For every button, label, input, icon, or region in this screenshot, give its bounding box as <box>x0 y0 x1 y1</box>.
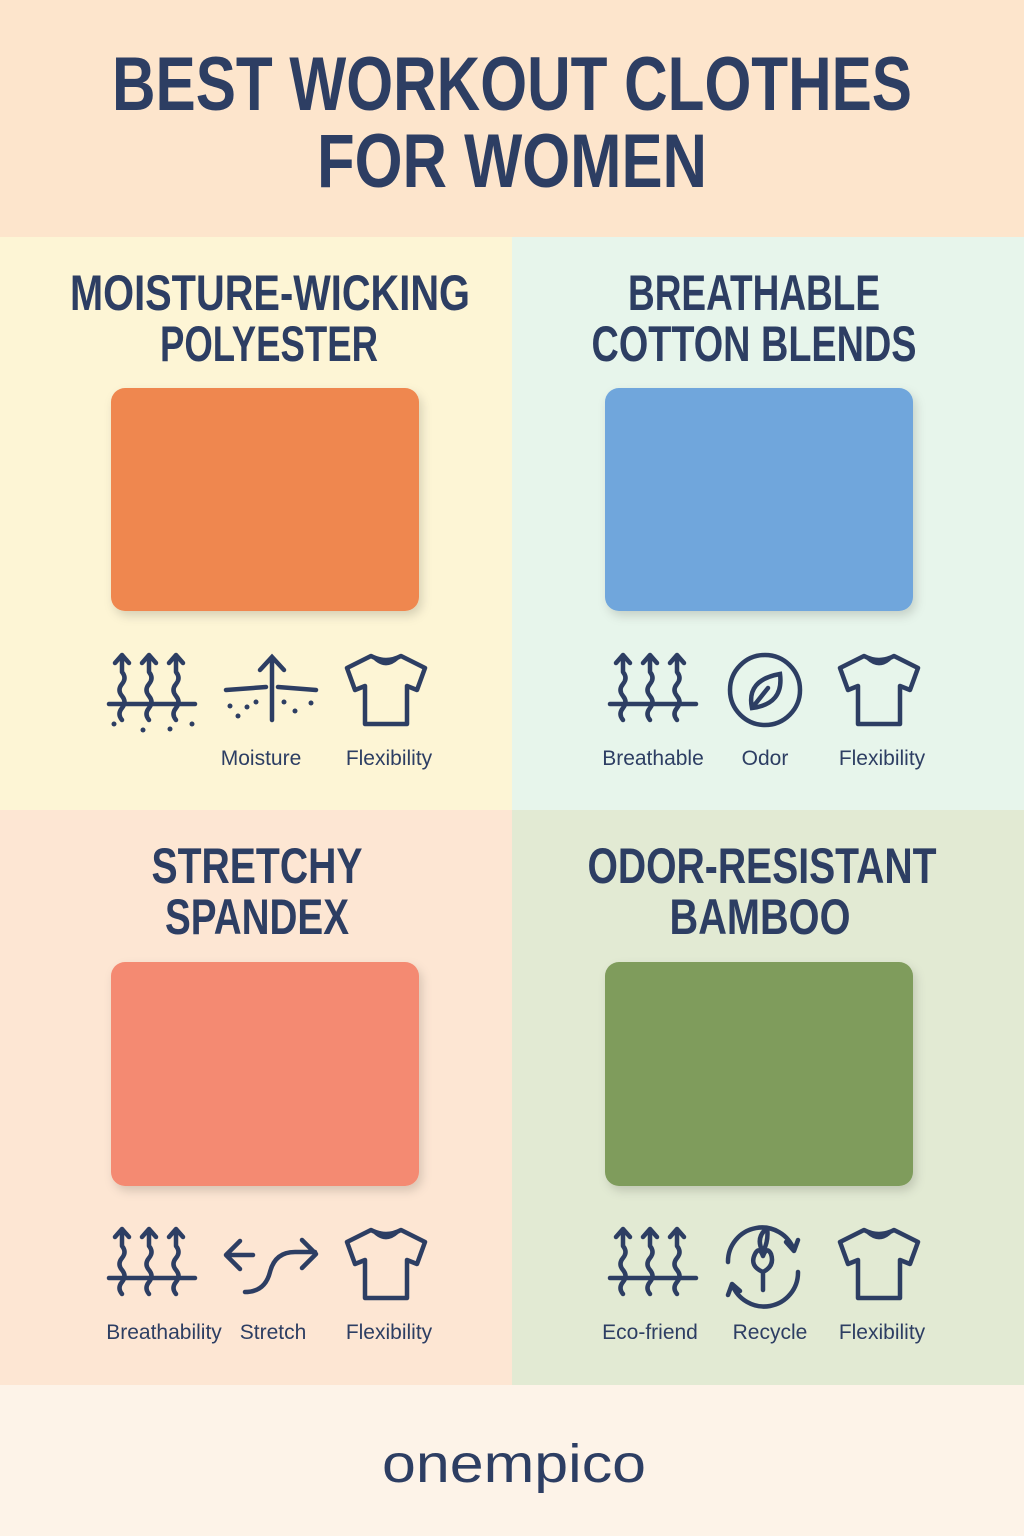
heading: stretchy spandex <box>152 838 362 945</box>
labels: Flexibility <box>346 1321 433 1344</box>
labels: Flexibility <box>346 747 433 770</box>
icon: shirt flexibility <box>347 1230 425 1298</box>
labels: Eco-friend <box>602 1321 698 1344</box>
labels: Flexibility <box>839 747 926 770</box>
labels <box>602 1321 926 1344</box>
title <box>112 42 912 204</box>
heading: odor-resistant bamboo <box>588 838 936 945</box>
panel: stretchy spandex <box>0 810 512 1385</box>
icon: recycle leaf <box>728 1227 798 1307</box>
title: FOR WOMEN <box>317 119 707 204</box>
labels: Moisture <box>221 747 301 770</box>
labels <box>602 747 926 770</box>
heading: stretchy spandex: STRETCHY <box>152 838 362 894</box>
heading: odor-resistant bamboo: ODOR-RESISTANT <box>588 838 936 894</box>
swatch: orange fabric <box>111 388 419 611</box>
heading: breathable cotton blends <box>592 265 916 372</box>
swatch: green fabric <box>605 962 913 1186</box>
icon: shirt flexibility <box>840 1230 918 1298</box>
icon: odor leaf circle <box>730 655 800 725</box>
heading: stretchy spandex: SPANDEX <box>165 889 349 945</box>
panel: breathable cotton blends <box>512 237 1024 810</box>
icon: shirt flexibility <box>347 656 425 724</box>
icon: eco waves <box>610 1229 696 1294</box>
icon: breathable waves <box>610 655 696 720</box>
icon: moisture <box>226 657 316 720</box>
heading: breathable cotton blends: COTTON BLENDS <box>592 316 916 372</box>
labels: Stretch <box>240 1321 306 1344</box>
labels: Breathability <box>106 1321 222 1344</box>
swatch: blue fabric <box>605 388 913 611</box>
panel: moisture-wicking polyester <box>0 237 512 810</box>
heading: odor-resistant bamboo: BAMBOO <box>670 889 850 945</box>
labels <box>106 1321 433 1344</box>
panel: odor-resistant bamboo <box>512 810 1024 1385</box>
icon: shirt flexibility <box>840 656 918 724</box>
heading: moisture-wicking polyester: MOISTURE-WICKING <box>70 265 470 321</box>
heading: moisture-wicking polyester: POLYESTER <box>160 316 378 372</box>
header background <box>0 0 1024 237</box>
labels: Flexibility <box>839 1321 926 1344</box>
footer brand: onempico <box>382 1434 646 1494</box>
heading: moisture-wicking polyester <box>70 265 470 372</box>
swatch: coral fabric <box>111 962 419 1186</box>
heading: breathable cotton blends: BREATHABLE <box>628 265 880 321</box>
icon: wicking waves with drops <box>109 655 195 732</box>
icon: stretch arrows <box>226 1240 316 1292</box>
labels: Recycle <box>733 1321 807 1344</box>
labels: Breathable <box>602 747 704 770</box>
labels: Odor <box>742 747 788 770</box>
footer background <box>0 1385 1024 1536</box>
labels <box>221 747 433 770</box>
icon: breathability waves <box>109 1229 195 1294</box>
